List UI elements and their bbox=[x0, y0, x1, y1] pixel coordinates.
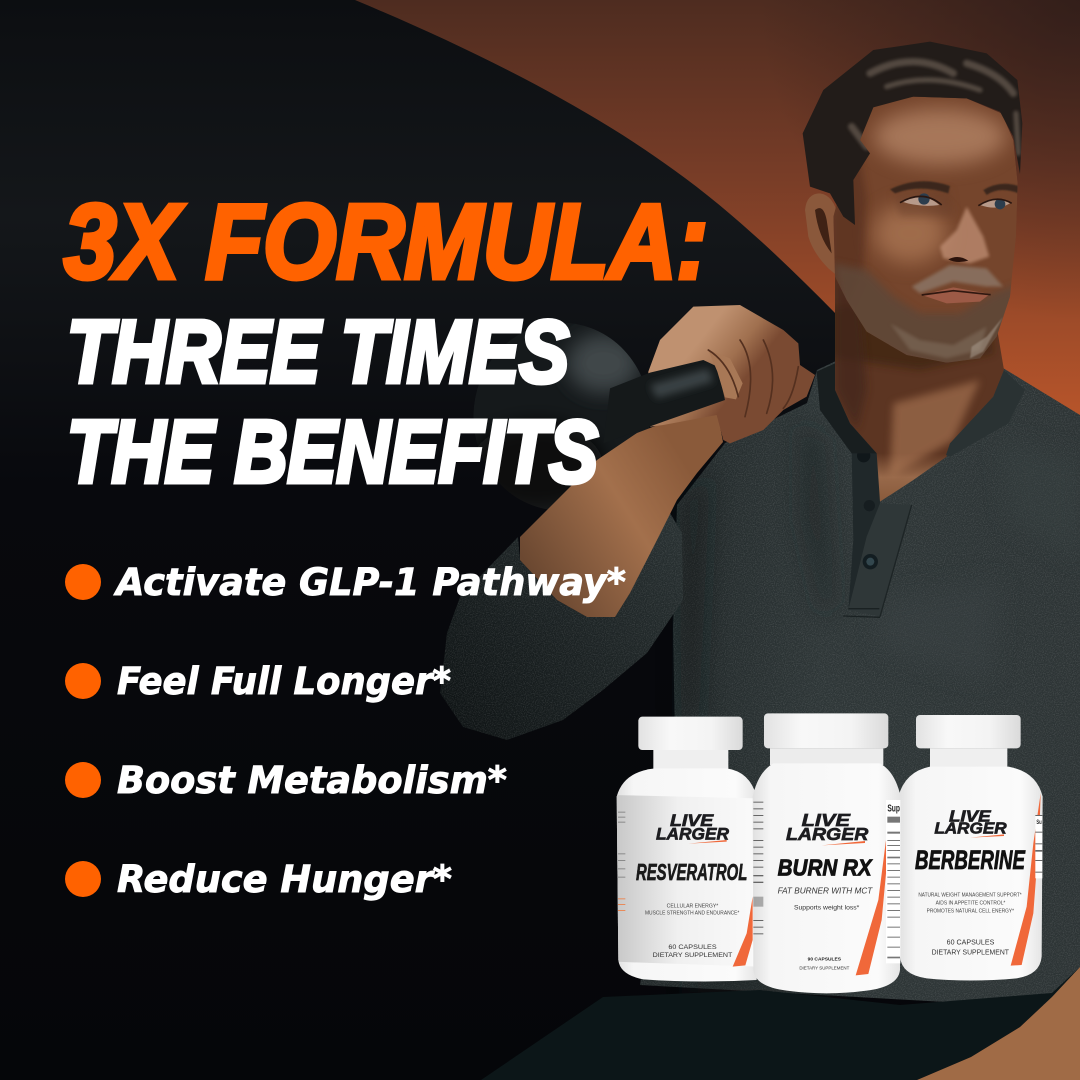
cheek highlight bbox=[873, 203, 947, 263]
handle highlight bbox=[650, 368, 713, 398]
kettlebell handle bbox=[603, 360, 725, 443]
moustache bbox=[912, 265, 1003, 293]
kettlebell body bbox=[470, 323, 650, 511]
bottle: Resveratrol: CELLULAR ENERGY* bbox=[667, 903, 718, 909]
bullet: Reduce Hunger: Reduce Hunger* bbox=[117, 858, 452, 901]
bottle: Burn RX bbox=[753, 713, 901, 993]
left face shadow bbox=[834, 166, 868, 282]
head bbox=[803, 42, 1022, 370]
hand silhouette bbox=[648, 305, 815, 443]
title bbox=[64, 183, 708, 501]
forearm bbox=[520, 410, 723, 617]
benefits list bbox=[65, 561, 626, 901]
title line: THE BENEFITS: THE BENEFITS bbox=[67, 402, 598, 501]
bottle: Burn RX: FAT BURNER WITH MCT bbox=[778, 886, 873, 895]
product bottles bbox=[613, 713, 1043, 993]
bottle: Resveratrol: MUSCLE STRENGTH AND ENDURANCE* bbox=[645, 910, 739, 916]
mouth bbox=[922, 287, 990, 303]
bullet: Feel Full Longer: Feel Full Longer* bbox=[117, 660, 451, 703]
forearm lower right bbox=[917, 967, 1080, 1080]
bottle: Berberine: DIETARY SUPPLEMENT bbox=[932, 949, 1010, 956]
bottle: Burn RX: LIVE bbox=[802, 810, 851, 830]
sleeve bbox=[440, 513, 683, 740]
pants bbox=[481, 967, 1080, 1080]
shirt folds bbox=[680, 420, 1080, 1000]
bottle: Burn RX: Sup bbox=[887, 803, 900, 814]
beard stubble bbox=[835, 264, 1011, 362]
bullet: Boost Metabolism: Boost Metabolism* bbox=[117, 759, 507, 802]
bottle: Berberine: AIDS IN APPETITE CONTROL* bbox=[936, 900, 1005, 906]
bottle: Berberine bbox=[898, 715, 1043, 980]
bottle: Resveratrol: DIETARY SUPPLEMENT bbox=[653, 952, 732, 959]
hair highlights bbox=[852, 62, 1018, 153]
eyes bbox=[902, 197, 939, 206]
bottle: Resveratrol: RESVERATROL bbox=[636, 859, 747, 885]
bottle: Berberine: 60 CAPSULES bbox=[947, 940, 995, 947]
bottle: Resveratrol bbox=[613, 717, 757, 982]
torso and shirt bbox=[640, 340, 1080, 1005]
bottle: Berberine: Su bbox=[1036, 819, 1042, 826]
bottle: Resveratrol: LARGER bbox=[656, 824, 729, 843]
bottle: Berberine: LIVE bbox=[949, 809, 992, 826]
bottle: Berberine: PROMOTES NATURAL CELL ENERGY* bbox=[927, 908, 1014, 914]
forehead highlight bbox=[873, 108, 1007, 165]
bottle: Burn RX: BURN RX bbox=[778, 855, 873, 881]
bottle: Berberine: BERBERINE bbox=[915, 845, 1026, 875]
background: orange curved panel bbox=[355, 0, 1080, 415]
bottle: Resveratrol: LIVE bbox=[670, 811, 714, 830]
title line: 3X FORMULA: 3X FORMULA: bbox=[64, 183, 708, 301]
eyebrows bbox=[890, 181, 950, 193]
bottle: Berberine: NATURAL WEIGHT MANAGEMENT SUPPORT* bbox=[918, 892, 1022, 898]
hair bbox=[803, 42, 1022, 225]
bottle: Burn RX: DIETARY SUPPLEMENT bbox=[799, 965, 849, 970]
bottle: Resveratrol: 60 CAPSULES bbox=[668, 944, 717, 951]
nose bbox=[940, 207, 989, 263]
chin grey patch bbox=[970, 317, 1003, 358]
eye sockets bbox=[897, 196, 947, 218]
photo: man holding kettlebell bbox=[440, 42, 1080, 1080]
bullet: Activate GLP-1 Pathway: Activate GLP-1 Pathway* bbox=[113, 561, 626, 604]
bottle: Berberine: LARGER bbox=[934, 820, 1007, 837]
hand gripping kettlebell handle bbox=[603, 305, 815, 443]
title line: THREE TIMES: THREE TIMES bbox=[67, 302, 569, 401]
bottle: Burn RX: LARGER bbox=[786, 824, 868, 844]
ear bbox=[805, 193, 838, 277]
face skin and features bbox=[830, 97, 1020, 370]
bottle: Burn RX: Supports weight loss* bbox=[794, 905, 860, 911]
fingers bbox=[708, 350, 743, 399]
bottle: Burn RX: 90 CAPSULES bbox=[808, 956, 841, 961]
henley placket and buttons bbox=[843, 449, 912, 617]
neck bbox=[817, 273, 1025, 502]
